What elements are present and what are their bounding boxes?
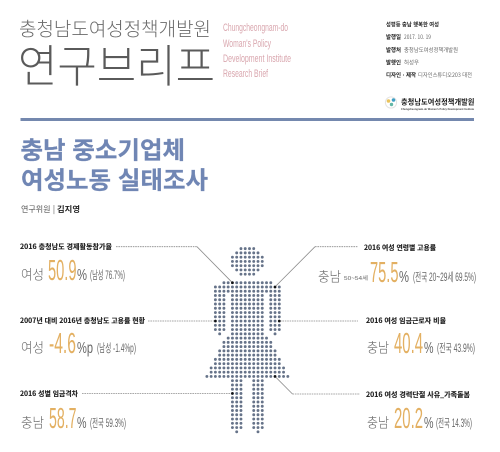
stat: career break reason, family care: 충남: [367, 412, 389, 432]
stat: employment rate change: %p: [77, 340, 93, 357]
stat: career break reason, family care: 2016 여성 경력단절 사유_가족돌봄: [366, 389, 471, 399]
header rule: [20, 118, 474, 121]
publication details: 디자인스튜디오203 대전: [418, 71, 472, 79]
stat: economic participation rate: %: [77, 267, 87, 284]
main title: [20, 130, 208, 196]
logo: Chungcheongnam-do Women's Policy Development Institute: [401, 107, 474, 111]
stat: career break reason, family care: %: [424, 415, 434, 432]
stat: employment rate change: 2007년 대비 2016년 충청남도 고용률 현황: [20, 315, 146, 325]
stat: female wage worker ratio: 충남: [367, 336, 389, 356]
english name block: Chungcheongnam-do: [223, 22, 288, 34]
english name block: Research Brief: [223, 68, 269, 80]
english name block: [223, 22, 291, 80]
body dots: [207, 283, 288, 376]
publication details: 발행인: [386, 58, 401, 66]
stat: employment rate change: 여성: [21, 336, 44, 356]
head dots: [232, 249, 262, 274]
stat: female wage worker ratio: 2016 여성 임금근로자 비율: [366, 315, 447, 325]
stat: economic participation rate: 여성: [21, 264, 44, 284]
publication details: 2017. 10. 19: [404, 33, 431, 41]
stat: economic participation rate: 2016 충청남도 경제활동참가율: [20, 241, 113, 251]
stat: career break reason, family care: [366, 389, 472, 435]
stat: female wage worker ratio: 40.4: [394, 328, 423, 360]
stat: employment rate change: (남성 -1.4%p): [97, 342, 136, 355]
stat: economic participation rate: (남성 76.7%): [90, 269, 125, 282]
brief title: 연구브리프: [18, 30, 215, 95]
publication details: 디자인 · 제작: [386, 71, 416, 79]
stat: economic participation rate: 50.9: [48, 255, 76, 287]
author: 김지영: [57, 203, 80, 215]
publication details: 성평등 충남 행복한 여성: [386, 20, 439, 28]
publication details: [386, 20, 472, 79]
english name block: Development Institute: [223, 53, 291, 65]
masthead: publisher and brief name: [18, 14, 215, 95]
stat: gender wage gap: (전국 59.3%): [90, 417, 126, 430]
stat: employment rate by age: 충남: [318, 266, 341, 286]
publication details: 발행처: [386, 46, 401, 54]
icon: institute emblem: [385, 97, 397, 108]
logo: 충청남도여성정책개발원: [401, 96, 475, 108]
stat: career break reason, family care: (전국 14.3%): [436, 417, 472, 430]
connector lines: [82, 247, 360, 395]
stat: gender wage gap: 58.7: [49, 403, 76, 435]
stat: employment rate by age: 75.5: [370, 257, 398, 289]
english name block: Woman's Policy: [223, 38, 271, 50]
stat: employment rate change: [20, 315, 146, 360]
stat: employment rate by age: 2016 여성 연령별 고용률: [364, 242, 437, 252]
stat: gender wage gap: 2016 성별 임금격차: [20, 388, 79, 398]
publication details: 허성우: [404, 58, 419, 66]
stat: gender wage gap: [20, 388, 126, 435]
publisher name: 충청남도여성정책개발원: [19, 14, 211, 42]
stat: employment rate by age: [318, 242, 476, 289]
stat: employment rate change: -4.6: [49, 328, 76, 360]
stat: female wage worker ratio: %: [424, 340, 434, 357]
stat: female wage worker ratio: (전국 43.9%): [437, 342, 475, 355]
main title: 충남 중소기업체: [20, 130, 185, 166]
author: 연구위원 |: [21, 203, 55, 215]
pictogram: dotted woman figure: [207, 249, 288, 432]
publication details: 충청남도여성정책개발원: [404, 46, 458, 54]
logo: [385, 96, 475, 111]
publication details: 발행일: [386, 33, 401, 41]
stat: gender wage gap: 충남: [21, 412, 44, 432]
stat: employment rate by age: 50~54세: [344, 274, 368, 282]
stat: economic participation rate: [20, 241, 125, 287]
stat: gender wage gap: %: [77, 415, 86, 432]
stat: career break reason, family care: 20.2: [394, 403, 423, 435]
leg dots: [232, 381, 262, 432]
main title: 여성노동 실태조사: [21, 160, 208, 196]
stat: female wage worker ratio: [366, 315, 475, 360]
stat: employment rate by age: %: [399, 269, 409, 286]
author: [21, 203, 80, 215]
